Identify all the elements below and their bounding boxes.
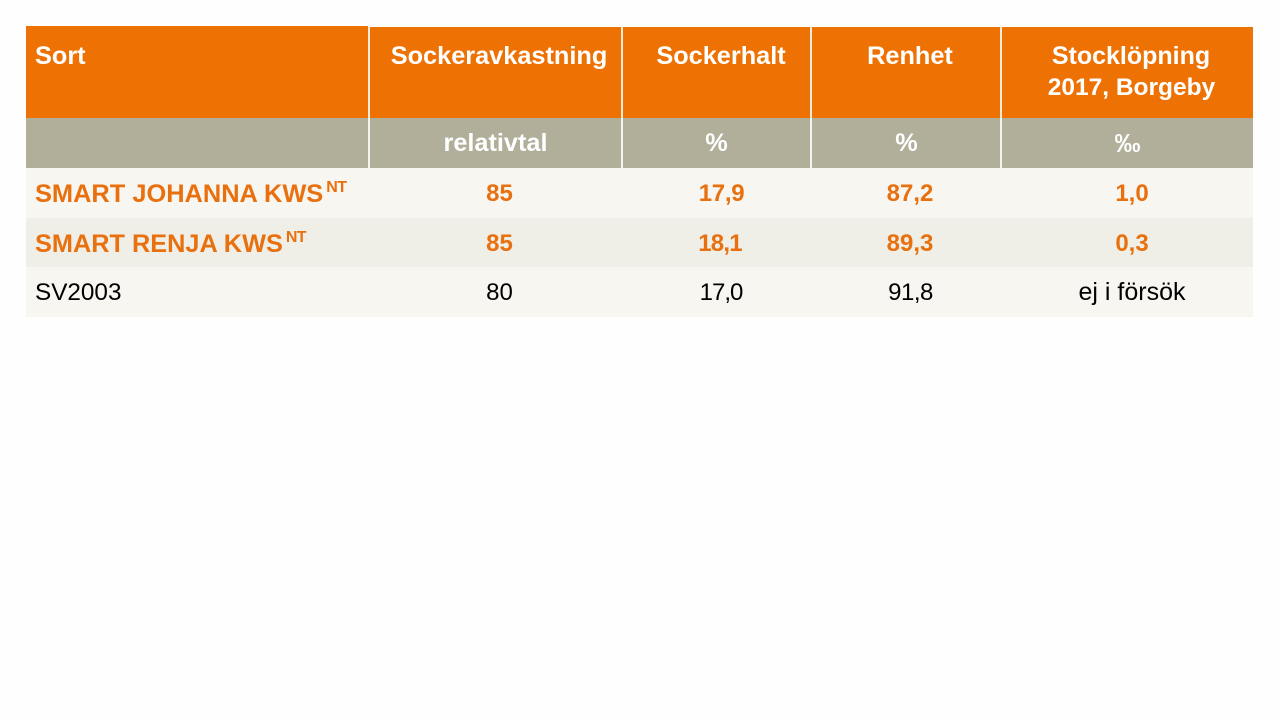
heading: Sort: Sort xyxy=(35,42,86,70)
value: 80: 80 xyxy=(486,279,513,306)
value: 18,1: 18,1 xyxy=(698,230,742,257)
variety: SMART RENJA KWS NT: SMART RENJA KWSNT xyxy=(35,229,306,258)
row: SMART JOHANNA KWS background xyxy=(26,168,1253,218)
value: 17,0: 17,0 xyxy=(700,279,742,306)
unit row: grey xyxy=(26,118,1253,168)
value: 85: 85 xyxy=(486,230,513,257)
header cell top edge: Sort xyxy=(26,26,368,28)
column divider 3 xyxy=(810,27,812,168)
heading: Sockeravkastning: Sockeravkastning xyxy=(391,42,607,70)
variety: SV2003: SV2003 xyxy=(35,279,121,306)
value: 91,8: 91,8 xyxy=(888,279,933,306)
unit: percent sugar: % xyxy=(705,129,728,157)
value: 1,0: 1,0 xyxy=(1115,180,1149,207)
value: 87,2: 87,2 xyxy=(887,180,933,207)
column divider 2 xyxy=(621,27,623,168)
heading: Stocklöpning: Stocklöpning xyxy=(1052,42,1210,70)
table xyxy=(26,26,1253,317)
variety: SMART JOHANNA KWS NT: SMART JOHANNA KWSNT xyxy=(35,179,346,208)
unit: percent purity: % xyxy=(895,129,918,157)
value: 17,9: 17,9 xyxy=(699,180,744,207)
unit: relativtal: relativtal xyxy=(443,129,548,157)
row: SMART RENJA KWS background xyxy=(26,218,1253,267)
column divider 4 xyxy=(1000,27,1002,168)
heading: Renhet: Renhet xyxy=(867,42,953,70)
column divider 1 xyxy=(368,26,370,168)
value: 0,3: 0,3 xyxy=(1115,230,1149,257)
header row: orange xyxy=(26,27,1253,118)
value: 89,3: 89,3 xyxy=(887,230,933,257)
row: SV2003 background xyxy=(26,267,1253,317)
heading: Sockerhalt: Sockerhalt xyxy=(656,42,786,70)
value: ej i försök: ej i försök xyxy=(1079,278,1185,306)
unit: per mille: ‰ xyxy=(1114,128,1140,158)
heading: 2017, Borgeby: 2017, Borgeby xyxy=(1048,74,1215,101)
value: 85: 85 xyxy=(486,180,513,207)
